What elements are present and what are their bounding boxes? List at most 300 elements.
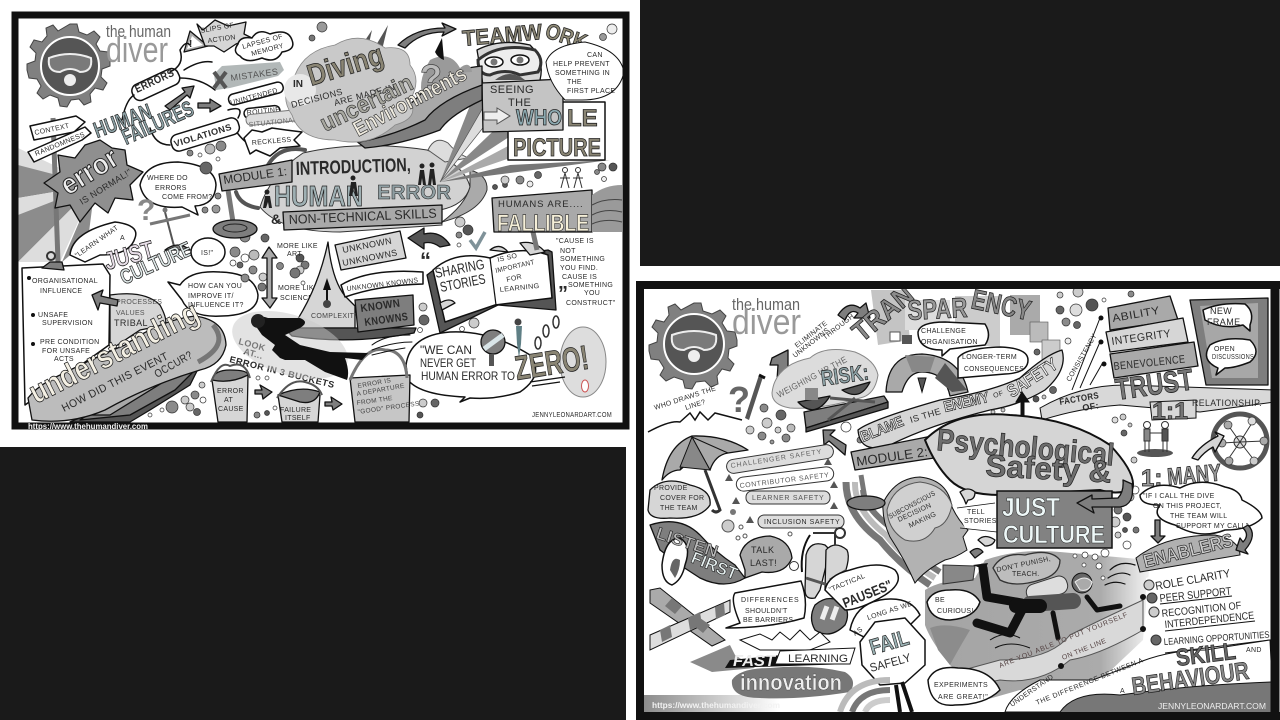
ear listen first: LISTEN [654, 524, 721, 562]
be curious cloud [927, 590, 980, 620]
longer-term bubble: CONSEQUENCES [964, 366, 1024, 373]
just culture heading: JUST [101, 236, 157, 276]
are you able band: ON THE LINE [1061, 638, 1107, 662]
eliminate unknowns text: UNKNOWNS [792, 327, 831, 360]
fail safely octagon: SAFELY [868, 651, 912, 675]
question and pen [728, 375, 765, 420]
differences bubble: DIFFERENCES [741, 597, 799, 604]
be curious cloud: CURIOUS! [937, 608, 974, 615]
mistakes burst: MISTAKES [230, 66, 279, 83]
differences bubble: BE BARRIERS [743, 617, 793, 624]
logo wordmark: diver [106, 29, 168, 70]
dots cluster 4 [148, 376, 277, 418]
teamwork diver mask [477, 42, 560, 85]
dots cluster 1 [187, 141, 226, 213]
cause quote: SOMETHING [568, 282, 613, 289]
signpost context randomness: RANDOMNESS [34, 131, 86, 158]
teamwork heading [461, 18, 590, 55]
consistency [1066, 316, 1106, 390]
how can you improve bubble: IMPROVE IT/ [188, 293, 234, 300]
slips of action burst [197, 20, 252, 52]
seesaw scale [798, 382, 888, 432]
bucket 3: ERROR IS [357, 377, 392, 390]
tactical pauses cloud: "TACTICAL [828, 573, 866, 594]
skill behaviour heading: SKILL [1174, 638, 1237, 672]
violation types: UNINTENDED [230, 88, 279, 107]
weighing up risk cloud: WEIGHING UP THE [775, 354, 849, 400]
dots cluster A [746, 404, 863, 444]
how can you improve bubble: HOW CAN YOU [188, 283, 242, 290]
safety pills [726, 444, 844, 528]
fin [435, 38, 444, 60]
team will support cloud: ON THIS PROJECT, [1153, 503, 1222, 510]
heading introduction: INTRODUCTION, [295, 155, 411, 180]
bucket 3: FROM THE [356, 395, 394, 407]
error is normal burst: IS NORMAL!" [78, 167, 134, 207]
ability integrity benevolence: ABILITY [1111, 305, 1161, 325]
ability integrity benevolence: INTEGRITY [1111, 328, 1172, 348]
team will support cloud: THE TEAM WILL [1170, 513, 1227, 520]
we can never bubble [406, 332, 536, 402]
cause quote: SOMETHING [560, 256, 605, 263]
head with brain: MAKING [908, 511, 938, 530]
human failures heading: FAILURES [118, 96, 197, 150]
new frame panel: OPEN [1214, 346, 1235, 353]
warning triangle: ! [189, 39, 192, 50]
grey flag block [943, 565, 975, 584]
cause quote: YOU [584, 290, 600, 297]
logo gear [27, 24, 110, 107]
in diving cloud: IN [293, 79, 303, 90]
human failures heading [90, 96, 197, 150]
arrow to seesaw [823, 430, 846, 455]
arrow left to unknowns [408, 228, 450, 249]
teamwork heading: ORK [542, 18, 590, 55]
logo wordmark: the human [106, 22, 171, 41]
arrow bucket 1 to 2 [255, 385, 272, 399]
team will support cloud [1140, 482, 1262, 534]
bucket 1 [211, 364, 250, 422]
longer-term bubble: LONGER-TERM [962, 354, 1017, 361]
learn what a bubble [70, 222, 136, 262]
credit jenny 2: JENNYLEONARDART.COM [1158, 701, 1266, 711]
understanding waves [65, 360, 205, 422]
bucket 3: "GOOD" PROCESS [357, 400, 420, 416]
tactical pauses cloud [825, 565, 898, 611]
we can never bubble: NEVER GET [420, 356, 477, 370]
errors pill: ERRORS [133, 67, 176, 96]
fallible box [492, 190, 592, 237]
learn what a bubble: "LEARN WHAT [74, 224, 120, 260]
arrow bucket 2 to 3 [325, 397, 342, 410]
fallible stand pole [533, 232, 537, 250]
clipboard: ORGANISATIONAL [32, 278, 98, 285]
in diving cloud: ARE MADE IN. [333, 81, 399, 108]
who draws the line [648, 385, 742, 432]
can help prevent bubble: CAN [587, 52, 603, 59]
fast learning: FAST [733, 653, 776, 670]
clipboard: INFLUENCE [40, 288, 82, 295]
error is normal burst [44, 140, 143, 222]
environments heading: Environments [349, 61, 471, 141]
talk last bubble [740, 536, 792, 578]
new frame panel [1190, 298, 1268, 385]
cause quote: ” [558, 283, 568, 305]
arrow to just culture [1077, 480, 1132, 513]
psychological safety blob: Safety & [985, 448, 1112, 490]
rays to seeing the whole picture [440, 85, 610, 182]
cause quote: NOT [560, 248, 576, 255]
head with brain [883, 477, 968, 583]
grey arrow to clipboard [92, 290, 118, 310]
sharing stories book: “ [420, 248, 431, 273]
zero heading [512, 339, 591, 388]
clipboard: PRE CONDITION [40, 339, 100, 346]
is bubble: IS!" [201, 250, 213, 257]
as long as we cloud: AS [852, 626, 864, 638]
understanding banner: understanding [23, 294, 205, 410]
frame border 2 [640, 285, 1280, 720]
provide cover cloud: COVER FOR [660, 495, 704, 502]
seeing the whole box: WHO [516, 105, 562, 130]
tell stories label: TELL [967, 509, 985, 516]
experiments cloud: EXPERIMENTS [934, 682, 988, 689]
in diving cloud: uncertain [316, 69, 418, 137]
panel: module 2 sketchnote [640, 279, 1280, 720]
we can never bubble: "WE CAN [420, 343, 472, 357]
diver [973, 563, 1120, 638]
human failures heading: HUMAN [90, 99, 155, 143]
cause quote: CONSTRUCT" [566, 300, 616, 307]
processes values tribal: VALUES [116, 310, 145, 317]
safety pills: CONTRIBUTOR SAFETY [739, 472, 830, 490]
module 2 sign [847, 436, 934, 510]
sharing stories book: SHARING [434, 256, 486, 281]
more like art science: ART [287, 251, 302, 258]
enablers list: ROLE CLARITY [1154, 568, 1232, 593]
teamwork heading: TEAMW [461, 19, 543, 51]
eliminate unknowns text: THROUGH [822, 313, 856, 342]
seeing the whole box [482, 79, 563, 132]
bucket 3 [350, 349, 420, 422]
provide cover cloud: THE TEAM [660, 505, 698, 512]
who draws the line: LINE? [684, 399, 707, 412]
heading human error: ERROR [377, 182, 452, 204]
bubbles above diver [1073, 549, 1109, 580]
psychological safety blob [925, 414, 1133, 495]
sharing stories book: FOR [506, 274, 523, 284]
pause button [812, 598, 848, 634]
tape [650, 588, 730, 650]
how can you improve bubble [168, 272, 258, 316]
transparency heading: TRAN [846, 279, 919, 348]
clipboard [22, 252, 110, 405]
as long as we cloud [850, 599, 920, 640]
arrows eliminate [770, 303, 870, 380]
question mark and scale [137, 194, 190, 250]
team will support cloud: SUPPORT MY CALL" [1176, 523, 1249, 530]
blame banner: ENEMY [942, 389, 991, 416]
umbrella [662, 436, 748, 512]
big arrow over module [236, 149, 305, 208]
processes values tribal: PROCESSES [116, 299, 162, 306]
enablers list [1144, 560, 1272, 660]
transparency squares [871, 290, 1060, 362]
tiny standing people [263, 162, 436, 208]
eliminate unknowns text: ELIMINATE [794, 320, 829, 350]
unknown knowns band [341, 271, 423, 297]
module 1 sign [213, 160, 292, 238]
trust band: OF: [1082, 400, 1100, 413]
differences bubble: SHOULDN'T [745, 608, 788, 615]
clipboard: SUPERVISION [42, 320, 93, 327]
heading non-technical skills: NON-TECHNICAL SKILLS [288, 206, 437, 227]
understand banner: UNDERSTAND [1009, 674, 1055, 709]
unknown unknowns box: UNKNOWNS [341, 247, 398, 268]
sharing stories book: IS SO [497, 253, 518, 264]
consistency: CONSISTENCY [1066, 333, 1099, 383]
just culture heading: CULTURE [117, 238, 195, 290]
waves behind head [846, 482, 940, 585]
dont punish cloud: DON'T PUNISH, [996, 556, 1051, 574]
understanding banner: OCCUR? [152, 349, 195, 381]
bucket 2: FAILURE [280, 407, 311, 414]
challenge organisation bubble: ORGANISATION [921, 339, 978, 346]
violations pill [169, 116, 241, 153]
frame border [15, 15, 626, 426]
signpost context randomness: CONTEXT [34, 123, 71, 137]
curved top arrow [398, 23, 456, 48]
enablers list: INTERDEPENDENCE [1164, 610, 1255, 631]
skill behaviour heading: AND [1246, 647, 1262, 654]
dont punish cloud: TEACH. [1012, 571, 1039, 578]
just culture box [997, 491, 1112, 549]
slips of action burst: SLIPS OF [200, 22, 235, 35]
tell stories label [955, 502, 997, 532]
waves near fins [372, 335, 412, 355]
blame banner: BLAME [858, 413, 906, 446]
bucket 1: AT [224, 397, 233, 404]
enablers list: RECOGNITION OF [1161, 600, 1242, 620]
magnifier and person [481, 318, 522, 366]
mistakes burst [214, 62, 284, 90]
weighing up risk cloud [772, 350, 878, 408]
ability integrity benevolence: BENEVOLENCE [1113, 354, 1186, 373]
one to many heading: MANY [1166, 459, 1222, 491]
team will support cloud: "IF I CALL THE DIVE [1143, 493, 1215, 500]
seeing the whole box: THE [508, 97, 531, 109]
who draws the line: WHO DRAWS THE [653, 385, 717, 412]
sharing stories book: LEARNING [499, 283, 540, 294]
unknown unknowns box: UNKNOWN [341, 236, 393, 255]
fallible waves [592, 185, 622, 232]
trust band: TRUST [1113, 363, 1195, 407]
dots cluster 5 [309, 22, 617, 190]
dont punish cloud [993, 552, 1060, 584]
longer-term bubble [958, 347, 1028, 378]
can help prevent bubble: SOMETHING IN [555, 70, 610, 77]
look at error in 3 buckets [229, 336, 336, 390]
lapses of memory cloud: LAPSES OF [242, 33, 284, 51]
where do errors come from bubble: ERRORS [155, 185, 187, 192]
safety pills: CHALLENGER SAFETY [730, 449, 822, 470]
understand banner: THE DIFFERENCE BETWEEN A [1035, 657, 1144, 707]
ear listen first [650, 522, 745, 585]
processes values tribal: TRIBAL [114, 318, 148, 328]
double arrow art to science [262, 247, 277, 308]
just culture box: CULTURE [1003, 521, 1105, 549]
ability integrity benevolence [1106, 296, 1198, 378]
background grey sea [644, 551, 1272, 713]
dots cluster 2 [230, 232, 309, 291]
heading human error [274, 181, 452, 213]
wave lines right of diver [1105, 563, 1135, 585]
experiments cloud: ARE GREAT!" [938, 694, 988, 701]
weighing up risk cloud: RISK: [819, 360, 870, 391]
is bubble [191, 238, 225, 266]
one to one relationship [1150, 398, 1262, 425]
cause quote: CAUSE IS [562, 274, 597, 281]
bucket 1: ERROR [217, 388, 244, 395]
more like art science: SCIENCE [280, 295, 313, 302]
can help prevent bubble: THE [567, 79, 582, 86]
one to many heading: 1: [1141, 465, 1162, 492]
psychological safety blob: Psychological [935, 422, 1116, 472]
big environment waves [355, 56, 482, 148]
cause quote: YOU FIND. [560, 265, 598, 272]
look at error in 3 buckets: LOOK [237, 336, 267, 353]
lapses of memory cloud [235, 32, 293, 61]
whole picture box: LE [567, 105, 598, 132]
cause quote [556, 238, 616, 307]
fast learning [690, 630, 855, 672]
provide cover cloud [648, 481, 710, 518]
signpost context randomness [28, 116, 91, 262]
blame banner: OF [992, 390, 1004, 400]
bucket 2 [277, 381, 322, 422]
can help prevent bubble: HELP PREVENT [553, 61, 610, 68]
fast learning: LEARNING [788, 653, 848, 665]
fail safely octagon [860, 618, 925, 712]
violation types: SITUATIONAL [248, 117, 298, 129]
in diving cloud: Diving [303, 38, 388, 93]
panel: module 1 sketchnote [15, 15, 626, 431]
handshake figures [1137, 422, 1173, 457]
new frame panel: FRAME [1207, 317, 1240, 327]
unknown unknowns box [335, 231, 406, 270]
violations pill: VIOLATIONS [173, 122, 233, 149]
pill triangles and dots [722, 458, 838, 540]
heading human error: HUMAN [274, 181, 363, 213]
enablers list: PEER SUPPORT [1159, 585, 1232, 605]
arrows to enablers [1151, 520, 1252, 554]
trust band [1040, 363, 1275, 420]
violation types [227, 81, 302, 156]
innovation cloud: innovation [740, 670, 842, 695]
seeing the whole box: SEEING [490, 84, 534, 96]
talk last bubble: LAST! [750, 558, 777, 568]
transparency heading [846, 279, 1034, 348]
where do errors come from bubble: COME FROM? [162, 194, 212, 201]
talk last bubble: TALK [751, 545, 774, 555]
ear listen first: FIRST [689, 548, 741, 584]
fallible box: HUMANS ARE.... [498, 199, 583, 210]
be curious cloud: BE [935, 597, 945, 604]
complexity pyramid [284, 242, 416, 340]
fallible box: FALLIBLE [497, 210, 589, 237]
arrow to safety [1016, 392, 1029, 419]
skill behaviour heading: BEHAVIOUR [1130, 657, 1251, 701]
clipboard: FOR UNSAFE [42, 348, 90, 355]
diver silhouette [224, 298, 368, 392]
clipboard: ACTS [54, 356, 74, 363]
url text 2: https://www.thehumandiver.com [652, 701, 780, 710]
are you able band: ARE YOU ABLE TO PUT YOURSELF [998, 612, 1129, 670]
blame banner: SAFETY [1003, 354, 1061, 401]
safety pills: LEARNER SAFETY [752, 495, 824, 502]
fail safely octagon: FAIL [866, 625, 912, 660]
module 1 title cloud [260, 140, 487, 232]
known knowns box: KNOWN [360, 298, 401, 315]
small speech icons [960, 489, 995, 558]
url text: https://www.thehumandiver.com [28, 422, 148, 431]
more like art science: MORE LIKE [278, 285, 319, 292]
challenge organisation bubble [918, 322, 988, 356]
flippers [360, 25, 388, 52]
more like art science [277, 243, 319, 302]
zero heading: ZERO! [512, 339, 591, 388]
logo wordmark 2: the human [732, 295, 800, 314]
in diving cloud: DECISIONS [290, 87, 344, 110]
sharing stories book: STORIES [439, 270, 487, 295]
logo gear 2 [649, 303, 737, 389]
one to many heading [1141, 459, 1222, 492]
in diving cloud [284, 38, 418, 142]
look at error in 3 buckets: ERROR IN 3 BUCKETS [229, 354, 336, 390]
whole picture box: PICTURE [513, 134, 601, 162]
complexity pyramid: COMPLEXITY [311, 313, 359, 320]
question and pen: ? [728, 379, 750, 420]
safety pills: INCLUSION SAFETY [764, 519, 840, 526]
blame banner: IS THE [909, 406, 942, 425]
where do errors come from bubble: WHERE DO [147, 175, 188, 182]
bucket 1: CAUSE [218, 406, 244, 413]
eliminate unknowns text [792, 313, 856, 360]
skill behaviour heading [1130, 638, 1262, 701]
sharing stories book [420, 242, 556, 333]
small arrows [165, 86, 221, 112]
tanks [790, 528, 848, 598]
challenge organisation bubble: CHALLENGE [921, 328, 966, 335]
bucket 3: A DEPARTURE [356, 383, 406, 398]
one to many network [1192, 414, 1268, 468]
whole picture box [508, 102, 605, 162]
connector lines [122, 43, 250, 145]
errors pill [130, 66, 182, 103]
gauge [886, 354, 968, 396]
more like art science: MORE LIKE [277, 243, 318, 250]
logo wordmark 2: diver [732, 301, 801, 342]
credit jenny: JENNYLEONARDART.COM [532, 412, 612, 419]
question mark and scale: ? [137, 194, 155, 227]
trust band: FACTORS [1059, 390, 1100, 407]
learn what a bubble: A [120, 235, 125, 242]
enablers banner: ENABLERS [1141, 530, 1235, 573]
look at error in 3 buckets: AT... [242, 346, 264, 361]
module 2 sign: MODULE 2: [855, 444, 929, 469]
dots cluster 3 [417, 217, 479, 418]
dots cluster B [991, 287, 1134, 414]
